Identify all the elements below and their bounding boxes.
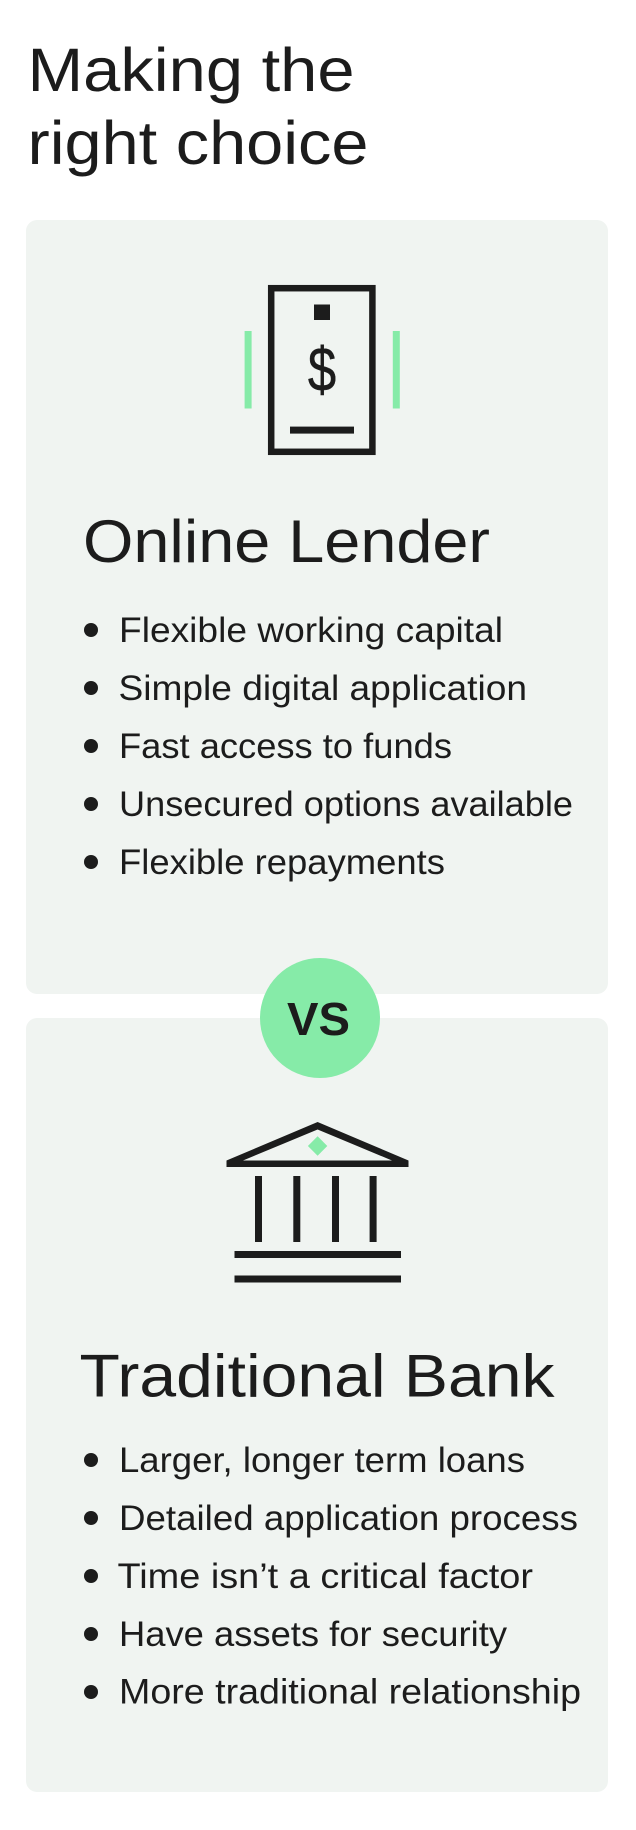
list: online lender benefits [84, 611, 573, 882]
heading: traditional bank: Traditional Bank [80, 1342, 556, 1410]
icon: phone with dollar sign: $ [308, 336, 336, 405]
list: traditional bank benefits: Larger, longer term loans [119, 1441, 525, 1480]
list: traditional bank benefits: More traditional relationship [119, 1672, 581, 1712]
heading: online lender: Online Lender [83, 508, 490, 575]
list: online lender benefits: Simple digital application [118, 669, 527, 708]
list: online lender benefits: Fast access to funds [119, 727, 452, 766]
icon: phone with dollar sign [245, 288, 400, 452]
list: traditional bank benefits [84, 1441, 581, 1712]
title: right choice [28, 109, 368, 177]
title: Making the [28, 36, 354, 104]
list: traditional bank benefits: Time isn’t a critical factor [118, 1557, 533, 1596]
title [28, 36, 368, 177]
list: traditional bank benefits: Have assets for security [119, 1615, 508, 1654]
list: online lender benefits: Unsecured options available [119, 785, 573, 824]
list: traditional bank benefits: Detailed application process [119, 1499, 578, 1538]
panel: online lender [26, 220, 608, 994]
badge: VS: VS [287, 993, 350, 1045]
badge: VS [260, 958, 380, 1078]
panel: traditional bank [26, 1018, 608, 1792]
list: online lender benefits: Flexible repayments [119, 843, 445, 882]
icon: bank building [226, 1122, 408, 1282]
list: online lender benefits: Flexible working capital [119, 611, 503, 650]
